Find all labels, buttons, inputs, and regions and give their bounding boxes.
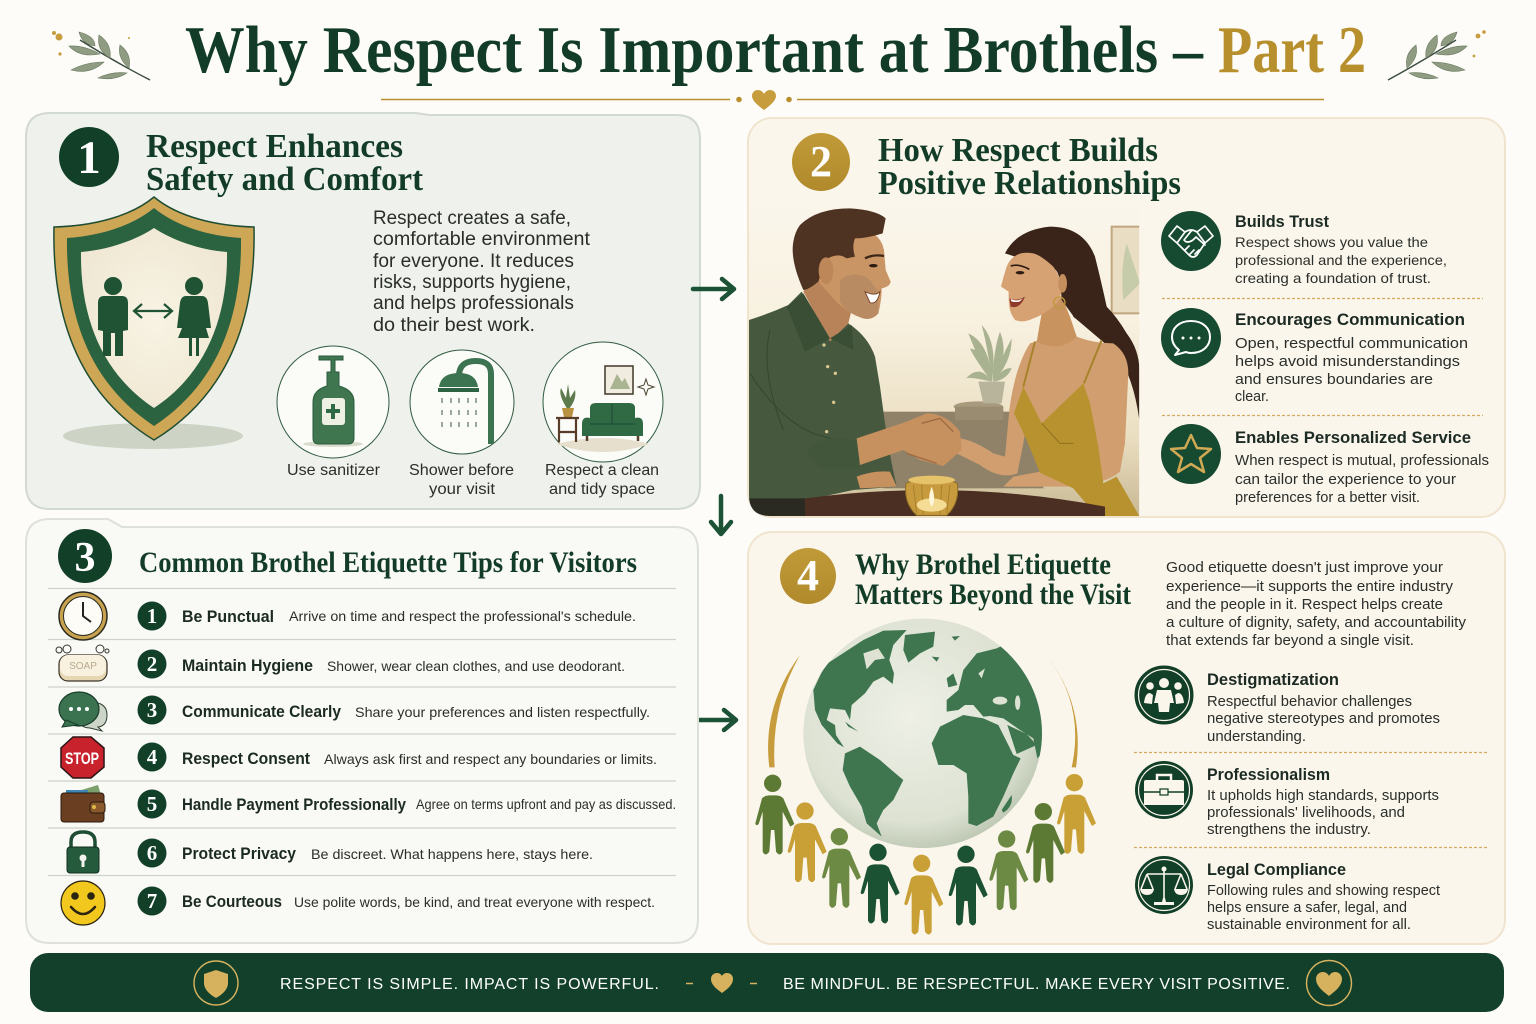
text: professionalism: Professionalism xyxy=(1207,765,1330,784)
heading: Respect Enhances xyxy=(146,128,403,165)
text: destigmatization xyxy=(1207,670,1440,745)
text: legal compliance xyxy=(1207,860,1441,933)
tip 7 row: Be Courteous xyxy=(182,892,282,911)
text: professionalism: strengthens the industry. xyxy=(1207,821,1371,838)
arrow: panel 1 to panel 3 xyxy=(711,496,731,534)
icon: people group xyxy=(1135,666,1193,724)
text: right slogan: BE MINDFUL. BE RESPECTFUL. MAKE EVERY VISIT POSITIVE. xyxy=(783,976,1290,993)
text: paragraph: and the people in it. Respect helps create xyxy=(1166,596,1443,613)
tip 1 row: Be Punctual xyxy=(182,607,274,626)
text: professionalism: professionals' livelihoods, and xyxy=(1207,804,1405,821)
icon: scales of justice xyxy=(1135,856,1193,914)
panel 4: beyond the visit xyxy=(748,532,1505,944)
tip 2 row xyxy=(56,645,625,681)
text: legal compliance: Following rules and showing respect xyxy=(1207,882,1441,899)
icon: shower xyxy=(410,350,514,454)
heading xyxy=(878,132,1181,202)
icon: left laurel sprig xyxy=(52,31,150,80)
tip 6 row: Be discreet. What happens here, stays here. xyxy=(311,846,593,862)
caption xyxy=(409,462,514,498)
icon: shield with two people xyxy=(54,197,254,449)
heading xyxy=(855,548,1131,611)
number badge 1: 1 xyxy=(77,132,101,184)
title: Why Respect Is Important at Brothels – xyxy=(185,13,1203,87)
text: encourages communication: Open, respectful communication xyxy=(1235,335,1468,352)
candle xyxy=(906,477,958,515)
icon: speech bubble xyxy=(1161,308,1221,368)
number badge 2: 2 xyxy=(810,137,832,186)
text: intro paragraph: for everyone. It reduces xyxy=(373,251,574,272)
tip 4 row: Respect Consent xyxy=(182,749,310,768)
woman xyxy=(1005,227,1139,420)
gold arcs xyxy=(768,655,1078,767)
text: builds trust: creating a foundation of trust. xyxy=(1235,270,1431,286)
text: enables personalized service: When respect is mutual, professionals xyxy=(1235,452,1489,469)
icon: center heart xyxy=(686,973,757,993)
tip 3 row: Share your preferences and listen respectfully. xyxy=(355,704,650,720)
text: legal compliance: helps ensure a safer, legal, and xyxy=(1207,899,1407,916)
title: Part 2 xyxy=(1218,13,1366,87)
footer banner xyxy=(30,953,1504,1012)
tip 7 row: 7 xyxy=(147,889,157,913)
text: professionalism: It upholds high standards, supports xyxy=(1207,787,1439,804)
text: builds trust xyxy=(1235,212,1447,286)
text: enables personalized service: preferences for a better visit. xyxy=(1235,489,1420,506)
text: intro paragraph: risks, supports hygiene, xyxy=(373,272,571,293)
caption: your visit xyxy=(429,481,496,498)
title divider with heart xyxy=(381,90,1324,110)
tip 5 row: 5 xyxy=(147,792,157,816)
text: builds trust: professional and the experience, xyxy=(1235,252,1447,268)
tip 2 row: Shower, wear clean clothes, and use deodorant. xyxy=(327,658,625,674)
text: encourages communication: helps avoid misunderstandings xyxy=(1235,353,1460,370)
icon: padlock xyxy=(67,832,99,873)
tip 4 row: Always ask first and respect any boundaries or limits. xyxy=(324,751,657,767)
text: builds trust: Respect shows you value the xyxy=(1235,234,1428,250)
text: encourages communication: Encourages Communication xyxy=(1235,310,1465,329)
icon: stop sign: STOP xyxy=(65,749,99,768)
text: paragraph: experience—it supports the entire industry xyxy=(1166,578,1454,595)
icon: smiley xyxy=(61,881,105,925)
number badge 3 xyxy=(58,529,112,583)
tip 5 row: Agree on terms upfront and pay as discussed. xyxy=(416,796,676,812)
text: intro paragraph: comfortable environment xyxy=(373,229,591,250)
text: intro paragraph xyxy=(373,208,591,336)
number badge 2 xyxy=(792,133,850,191)
caption: Shower before xyxy=(409,462,514,479)
text: left slogan: RESPECT IS SIMPLE. IMPACT IS POWERFUL. xyxy=(280,976,659,993)
icon: briefcase xyxy=(1135,761,1193,819)
icon: soap xyxy=(56,645,109,681)
tip 1 row: 1 xyxy=(147,604,157,628)
text: intro paragraph: do their best work. xyxy=(373,315,535,336)
man xyxy=(749,292,897,516)
text: encourages communication xyxy=(1235,310,1468,405)
text: professionalism xyxy=(1207,765,1439,838)
heading: Positive Relationships xyxy=(878,165,1181,202)
illustration: globe with ring of people xyxy=(755,619,1096,934)
text: enables personalized service: Enables Personalized Service xyxy=(1235,428,1471,447)
tip 3 row xyxy=(59,692,650,731)
heading: Safety and Comfort xyxy=(146,161,424,198)
icon: wallet xyxy=(61,785,105,822)
caption: Respect a clean xyxy=(545,462,659,479)
text: destigmatization: negative stereotypes and promotes xyxy=(1207,710,1440,727)
text: legal compliance: sustainable environment for all. xyxy=(1207,916,1411,933)
icon: handshake xyxy=(1161,211,1221,271)
text: intro paragraph: Respect creates a safe, xyxy=(373,208,571,229)
people xyxy=(755,774,1096,934)
tip 6 row: 6 xyxy=(147,841,157,865)
panel 1: safety and comfort xyxy=(26,113,700,509)
number badge 3: 3 xyxy=(74,535,96,581)
number badge 4 xyxy=(780,548,836,604)
tip 5 row: Handle Payment Professionally xyxy=(182,795,406,814)
text: legal compliance: Legal Compliance xyxy=(1207,860,1346,879)
text: paragraph: Good etiquette doesn't just improve your xyxy=(1166,559,1443,576)
heading: How Respect Builds xyxy=(878,132,1158,169)
icon: right laurel sprig xyxy=(1388,30,1486,80)
text: intro paragraph: and helps professionals xyxy=(373,293,574,314)
number badge 1 xyxy=(59,127,119,187)
tip 6 row xyxy=(67,832,593,873)
globe xyxy=(803,619,1047,848)
icon: star xyxy=(1161,424,1221,484)
text: destigmatization: Respectful behavior challenges xyxy=(1207,693,1412,710)
illustration: man and woman shaking hands xyxy=(749,193,1142,516)
text: encourages communication: and ensures boundaries are xyxy=(1235,371,1433,388)
text: encourages communication: clear. xyxy=(1235,388,1269,405)
text: paragraph xyxy=(1166,559,1467,649)
caption xyxy=(545,462,659,498)
tip 7 row xyxy=(61,881,655,925)
text: builds trust: Builds Trust xyxy=(1235,212,1329,231)
icon: tidy room xyxy=(543,342,663,462)
caption: Use sanitizer xyxy=(287,462,381,479)
text: paragraph: a culture of dignity, safety, and accountability xyxy=(1166,614,1467,631)
tip 4 row: 4 xyxy=(147,745,158,769)
heading: Why Brothel Etiquette xyxy=(855,548,1111,581)
text: destigmatization: Destigmatization xyxy=(1207,670,1339,689)
text: destigmatization: understanding. xyxy=(1207,728,1306,745)
text: enables personalized service: can tailor the experience to your xyxy=(1235,471,1456,488)
arrow: panel 3 to panel 4 xyxy=(699,710,736,730)
tip 3 row: Communicate Clearly xyxy=(182,702,341,721)
icon: soap: SOAP xyxy=(69,661,97,672)
panel 2: positive relationships xyxy=(748,118,1505,517)
tip 1 row: Arrive on time and respect the professional's schedule. xyxy=(289,608,636,624)
heading: Common Brothel Etiquette Tips for Visitors xyxy=(139,546,637,579)
icon: stop sign xyxy=(61,737,104,778)
tip 6 row: Protect Privacy xyxy=(182,844,296,863)
tip 3 row: 3 xyxy=(147,698,157,722)
text: enables personalized service xyxy=(1235,428,1489,506)
tip 1 row xyxy=(59,592,636,640)
panel 3: etiquette tips xyxy=(26,519,698,943)
tip 4 row xyxy=(61,737,657,778)
tip 2 row: 2 xyxy=(147,652,157,676)
text: paragraph: that extends far beyond a single visit. xyxy=(1166,632,1414,649)
icon: sanitizer bottle xyxy=(277,346,389,458)
icon: heart badge xyxy=(1306,960,1352,1006)
number badge 4: 4 xyxy=(797,551,819,600)
icon: shield badge xyxy=(194,961,238,1005)
arrow: panel 1 to panel 2 xyxy=(693,279,734,299)
tip 2 row: Maintain Hygiene xyxy=(182,656,313,675)
heading: Matters Beyond the Visit xyxy=(855,578,1131,611)
heading xyxy=(146,128,424,198)
icon: clock xyxy=(59,592,107,640)
tip 5 row xyxy=(61,785,676,822)
tip 7 row: Use polite words, be kind, and treat everyone with respect. xyxy=(294,894,655,910)
icon: chat bubbles xyxy=(59,692,107,731)
caption: and tidy space xyxy=(549,481,655,498)
